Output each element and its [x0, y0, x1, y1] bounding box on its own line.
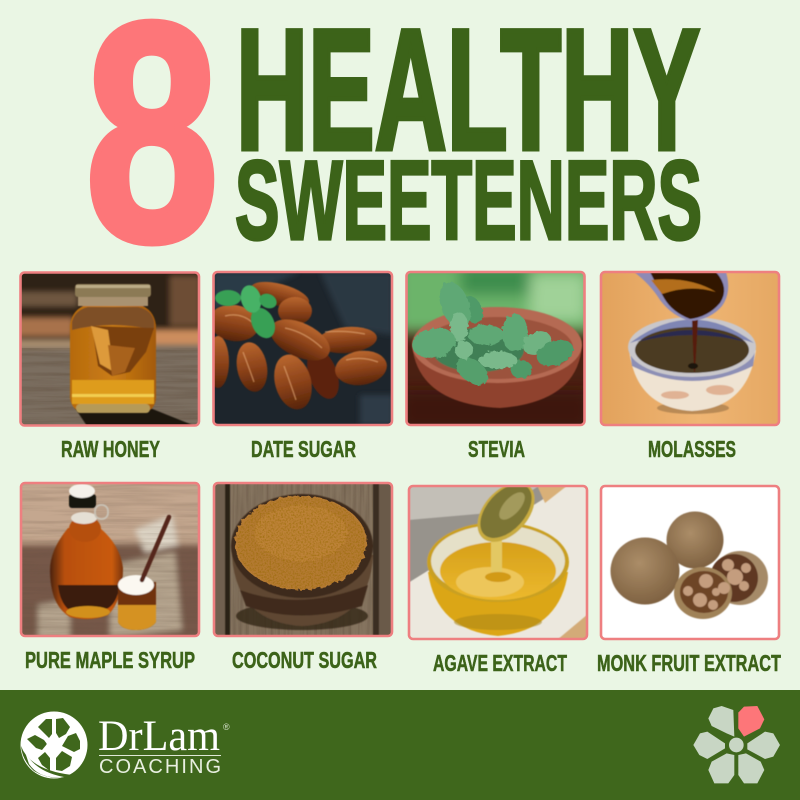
- image border: [406, 272, 584, 425]
- photo: monk fruit: [600, 485, 780, 640]
- image border: [20, 272, 199, 426]
- photo: dates on slate: [206, 271, 393, 426]
- label: STEVIA: [468, 436, 525, 462]
- icon: six-petal flower: [693, 706, 780, 783]
- card: stevia: [405, 270, 586, 458]
- photo: maple syrup bottle and glass: [22, 484, 198, 635]
- photo: coconut sugar in wooden bowl: [213, 482, 393, 637]
- logo wordmark: [98, 713, 230, 778]
- photo: honey jar: [22, 274, 198, 424]
- logo wordmark: COACHING: [99, 756, 221, 778]
- label: PURE MAPLE SYRUP: [25, 647, 195, 673]
- photo: agave syrup in glass bowl: [410, 487, 586, 638]
- image border: [409, 486, 587, 639]
- card: pure maple syrup: [15, 478, 205, 673]
- photo: molasses bowl and spoon: [600, 271, 780, 426]
- card: molasses: [600, 271, 780, 462]
- image border: [601, 272, 779, 425]
- card: raw honey: [19, 271, 200, 458]
- image border: [214, 483, 392, 636]
- image border: [601, 486, 779, 639]
- label: MOLASSES: [648, 436, 736, 462]
- logo wordmark: DrLam: [98, 713, 220, 760]
- logo wordmark: ®: [223, 722, 230, 732]
- footer band: [0, 690, 800, 800]
- card: agave extract: [408, 471, 588, 676]
- label: AGAVE EXTRACT: [433, 650, 567, 676]
- photo: stevia leaves in clay bowl: [408, 273, 584, 424]
- image border: [21, 483, 199, 636]
- card: coconut sugar: [213, 482, 393, 673]
- title: [85, 0, 702, 307]
- logo: DrLam flower mark: [20, 712, 88, 778]
- label: COCONUT SUGAR: [232, 647, 377, 673]
- label: DATE SUGAR: [251, 436, 356, 462]
- card: monk fruit extract: [597, 485, 781, 676]
- image border: [214, 272, 392, 425]
- label: RAW HONEY: [61, 436, 160, 462]
- card: date sugar: [206, 271, 393, 462]
